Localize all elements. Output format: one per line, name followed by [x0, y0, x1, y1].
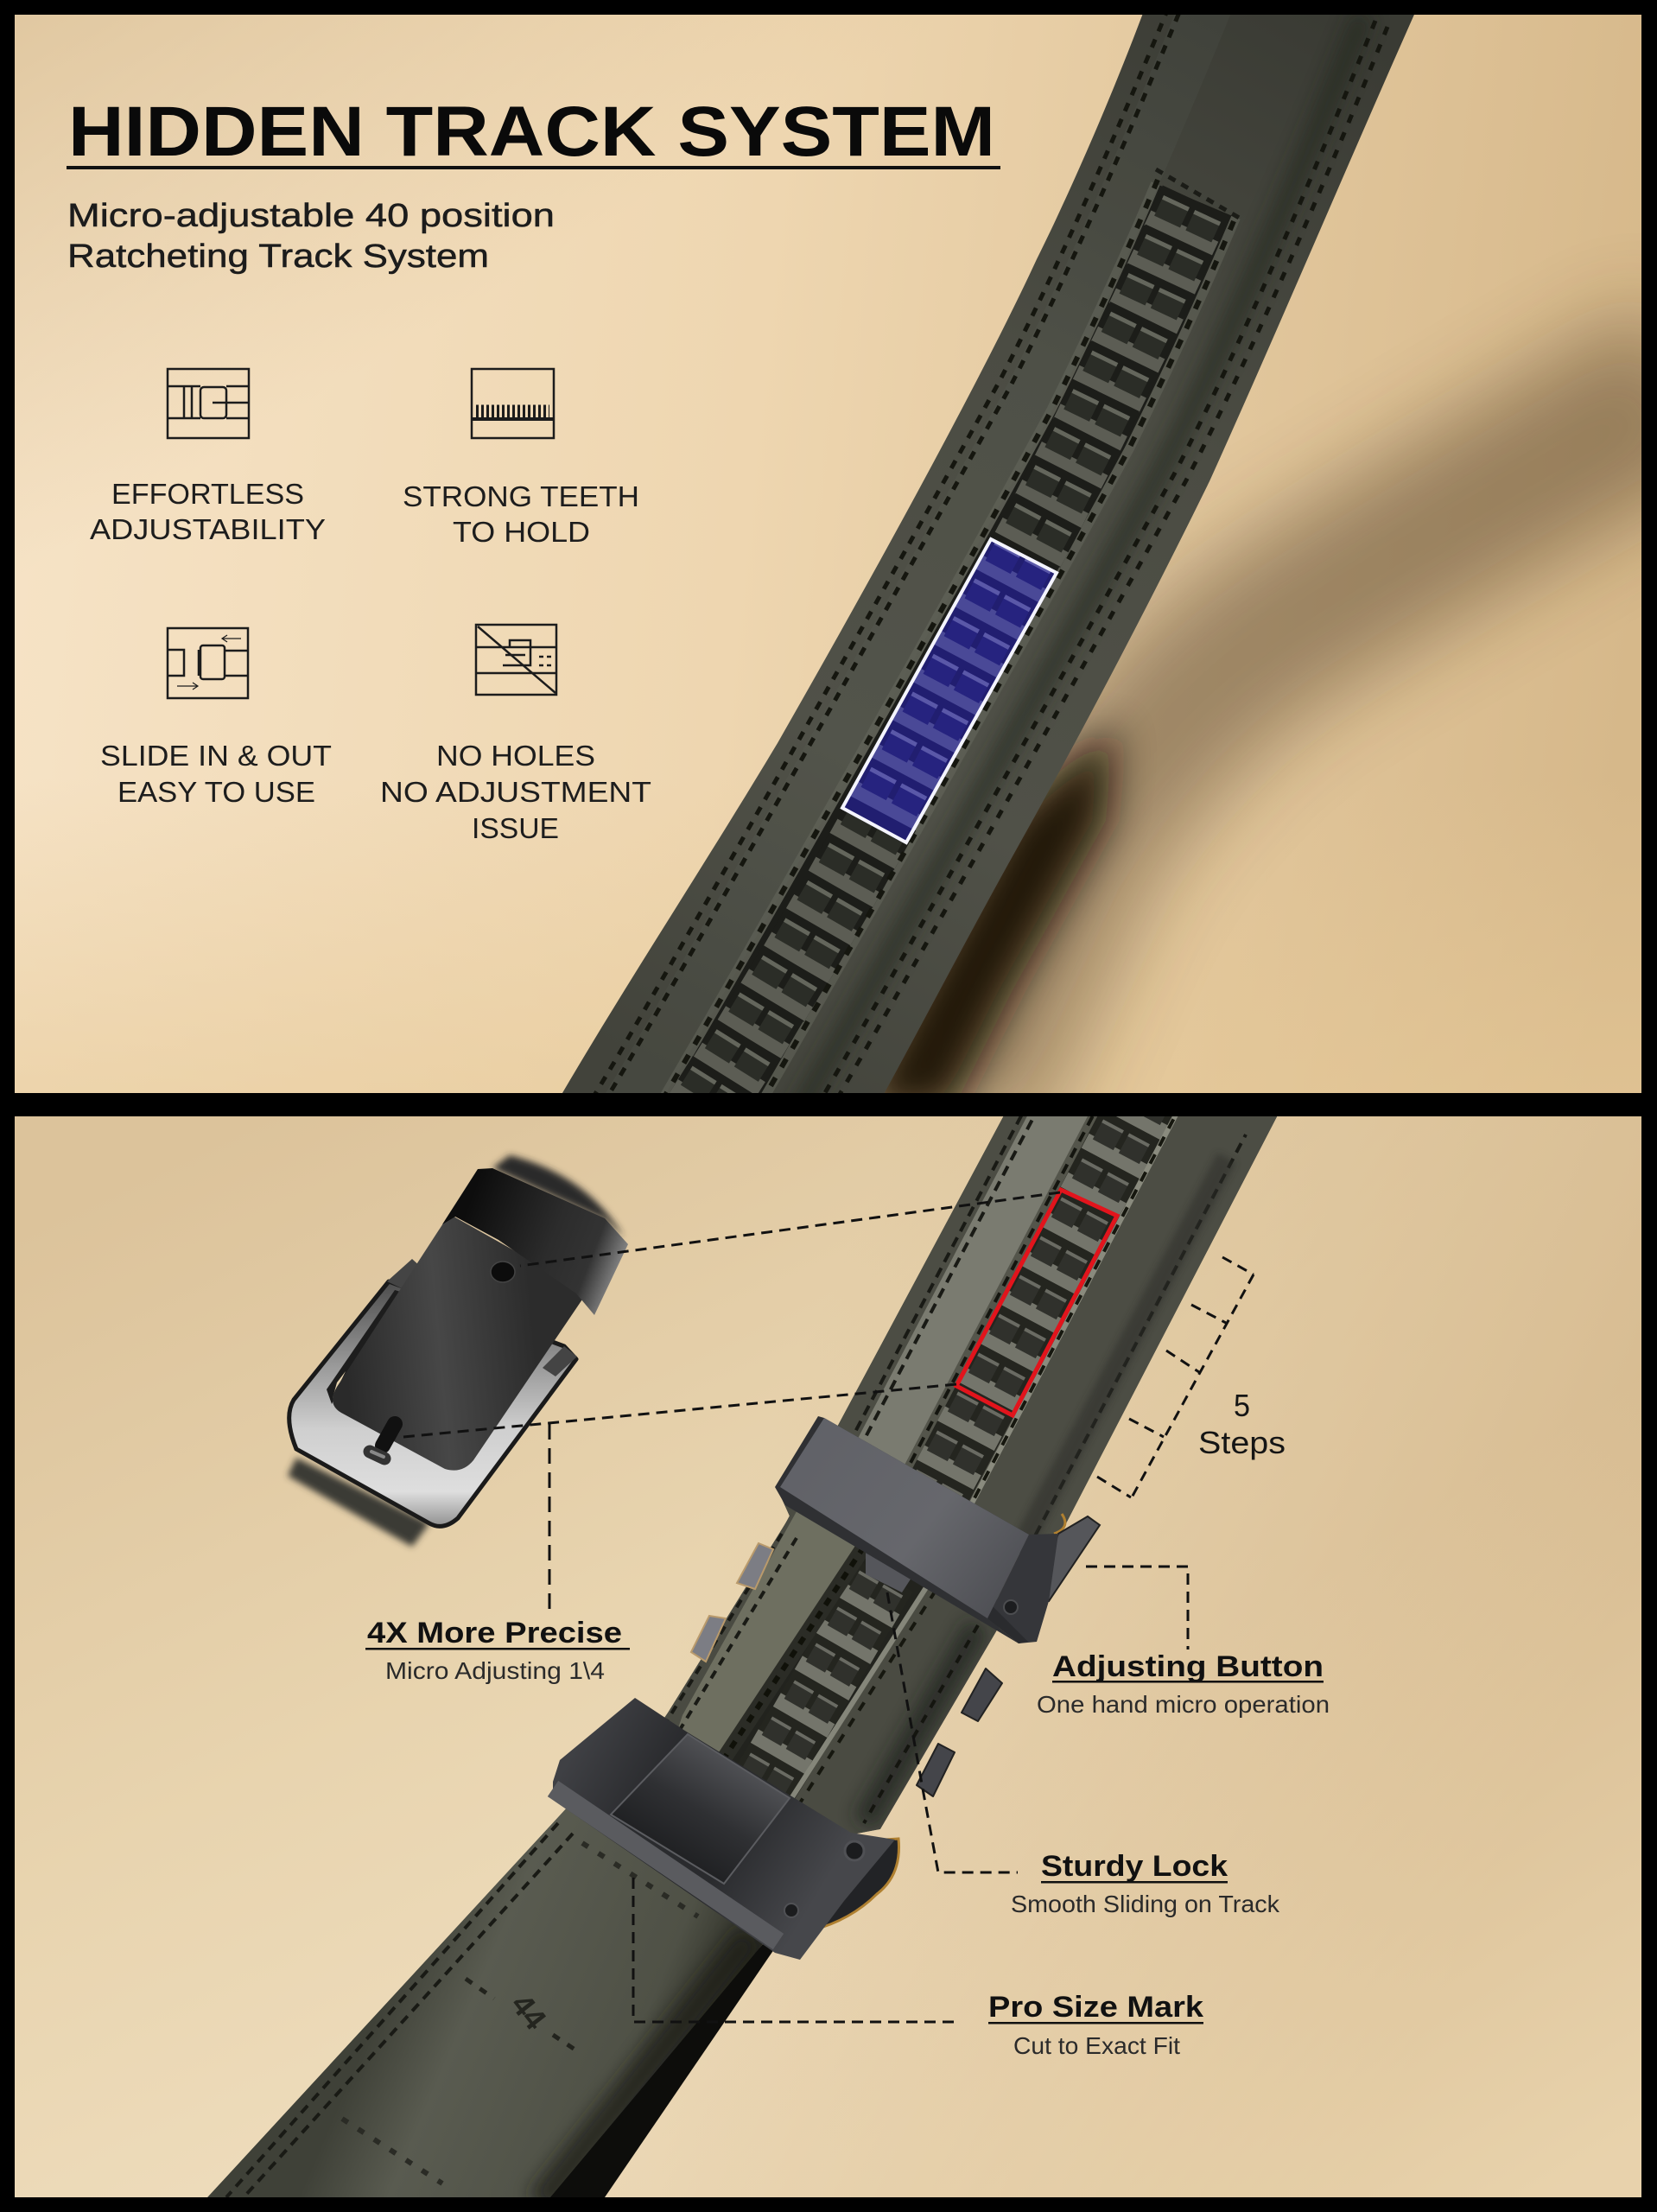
feature: strong teeth: STRONG TEETH: [403, 480, 639, 512]
belt strap middle section: [622, 1499, 1015, 1845]
feature: effortless adjustability: ADJUSTABILITY: [90, 513, 326, 545]
side tabs: [691, 1543, 1002, 1796]
subtitle: Micro-adjustable 40 position: [67, 198, 555, 234]
icon: belt buckle: [168, 369, 249, 438]
callout: sturdy lock: [1011, 1850, 1280, 1917]
pin buckle illustration: [288, 1155, 628, 1547]
feature: strong teeth: TO HOLD: [453, 516, 590, 548]
blue highlight box on track: [838, 531, 1063, 847]
callout: pro size mark: [988, 1991, 1203, 2059]
belt with ratchet track: [562, 15, 1414, 1093]
callout: pro size mark: Pro Size Mark: [988, 1991, 1203, 2024]
steps label: [1198, 1388, 1286, 1460]
steps bracket: [1097, 1257, 1254, 1497]
feature: no holes: NO HOLES: [436, 740, 595, 772]
panel: hidden track system: [15, 15, 1641, 1093]
feature: effortless adjustability: EFFORTLESS: [111, 478, 304, 510]
callout: pro size mark: Cut to Exact Fit: [1013, 2032, 1180, 2059]
feature: slide in and out: [100, 628, 332, 808]
dashed leader lines: [403, 1192, 1188, 2022]
callout: 4x more precise: [365, 1617, 630, 1684]
slider bar: [775, 1416, 1100, 1643]
callout: 4x more precise: Micro Adjusting 1\4: [385, 1657, 605, 1684]
buckle clasp: [553, 1698, 898, 1960]
feature: no holes: [380, 625, 651, 844]
feature: effortless adjustability: [90, 369, 326, 545]
icon: sliding buckle: [168, 628, 248, 698]
red highlight box on track: [956, 1190, 1117, 1415]
callout: adjusting button: [1037, 1650, 1330, 1718]
feature: strong teeth: [403, 369, 639, 548]
icon: teeth: [472, 369, 554, 438]
feature: no holes: ISSUE: [472, 812, 559, 844]
subtitle: Ratcheting Track System: [67, 238, 489, 275]
belt strap lower section with size mark: [207, 1780, 803, 2203]
callout: sturdy lock: Sturdy Lock: [1041, 1850, 1228, 1883]
callout: sturdy lock: Smooth Sliding on Track: [1011, 1891, 1280, 1917]
feature: slide in and out: EASY TO USE: [117, 776, 315, 808]
title: HIDDEN TRACK SYSTEM: [68, 92, 995, 171]
callout: 4x more precise: 4X More Precise: [367, 1617, 622, 1649]
subtitle: [67, 198, 555, 275]
steps label: Steps: [1198, 1425, 1286, 1460]
feature: no holes: NO ADJUSTMENT: [380, 776, 651, 808]
icon: crossed belt holes: [476, 625, 556, 695]
callout: adjusting button: One hand micro operation: [1037, 1691, 1330, 1718]
belt strap upper section: [778, 1039, 1280, 1611]
steps label: 5: [1234, 1388, 1250, 1423]
lock block under slider: [866, 1553, 911, 1592]
belt strap lower section with size mark: 44: [505, 1987, 554, 2036]
feature: slide in and out: SLIDE IN & OUT: [100, 740, 332, 772]
callout: adjusting button: Adjusting Button: [1052, 1650, 1324, 1683]
panel: belt details: [15, 1039, 1641, 2203]
